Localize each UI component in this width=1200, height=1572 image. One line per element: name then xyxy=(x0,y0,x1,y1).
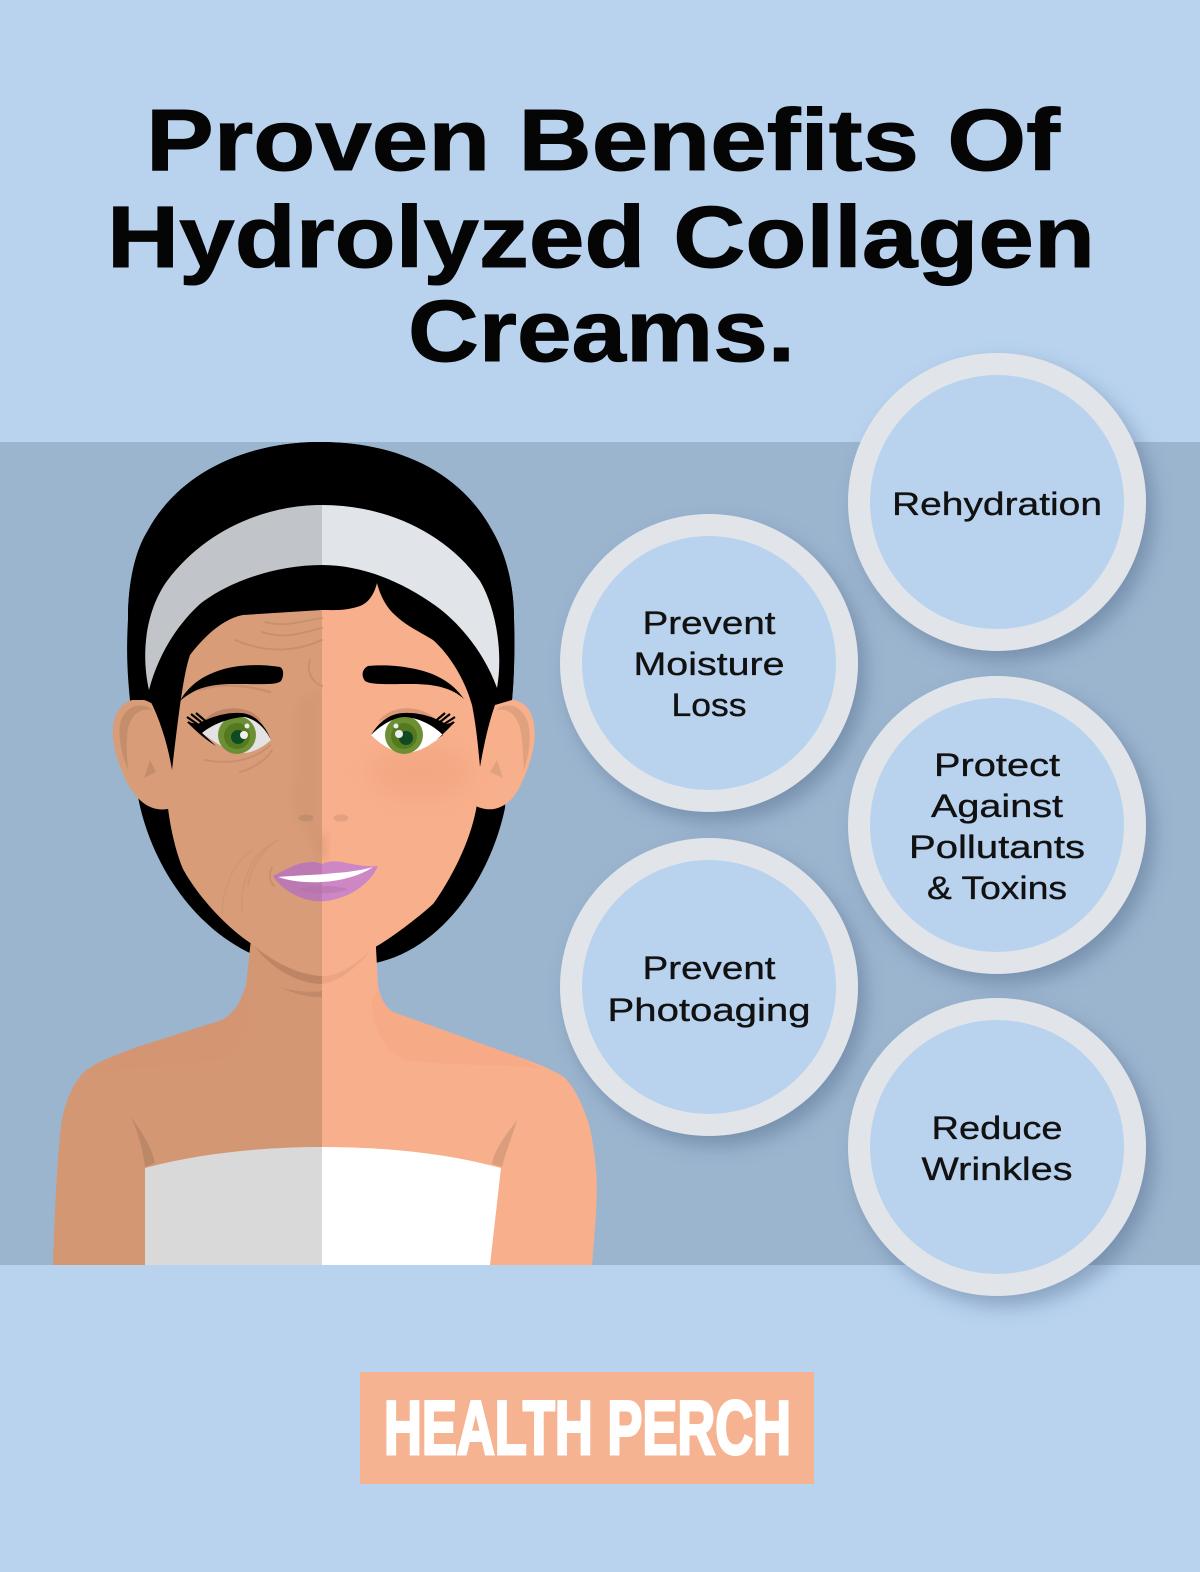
circle: Prevent Photoaging: Prevent xyxy=(642,950,776,986)
eye left xyxy=(187,708,271,754)
face shading: cheek, nose xyxy=(322,836,328,858)
circle: Prevent Photoaging: Photoaging xyxy=(608,992,810,1028)
eyebrows xyxy=(180,665,464,701)
circle: Reduce Wrinkles xyxy=(848,998,1146,1296)
ear right xyxy=(468,699,535,809)
headband xyxy=(145,505,499,690)
circle: Protect Against Pollutants & Toxins xyxy=(848,676,1146,974)
face right young xyxy=(322,583,478,976)
illustration: woman half aged half young xyxy=(53,442,597,1265)
middle band xyxy=(0,442,1200,1265)
eye right xyxy=(371,708,455,754)
collarbone shading xyxy=(90,987,540,1072)
circle: Prevent Moisture Loss xyxy=(560,514,858,812)
circle: Reduce Wrinkles: Wrinkles xyxy=(922,1151,1072,1187)
circle: Rehydration: Rehydration xyxy=(892,486,1102,522)
title xyxy=(107,92,1095,380)
hair front xyxy=(128,442,514,770)
circle: Prevent Moisture Loss: Prevent xyxy=(642,605,776,641)
title: Proven Benefits Of xyxy=(146,92,1061,189)
face left aged xyxy=(168,610,322,976)
circle: Rehydration xyxy=(848,353,1146,651)
lips xyxy=(273,861,378,901)
circle: Prevent Moisture Loss: Moisture xyxy=(634,646,784,682)
logo: Health Perch xyxy=(360,1372,814,1484)
circle: Prevent Photoaging xyxy=(560,838,858,1136)
circle: Protect Against Pollutants & Toxins: Against xyxy=(931,788,1063,824)
under-chin shadow xyxy=(255,946,369,997)
hair back xyxy=(127,442,514,963)
title: Hydrolyzed Collagen xyxy=(107,189,1095,286)
towel xyxy=(145,1147,501,1265)
circle: Prevent Moisture Loss: Loss xyxy=(672,687,746,723)
ear left xyxy=(113,699,178,810)
title: Creams. xyxy=(408,283,795,380)
wrinkles xyxy=(200,618,322,915)
nose xyxy=(298,814,348,822)
circle: Protect Against Pollutants & Toxins: Protect xyxy=(934,747,1060,783)
body right young xyxy=(322,946,597,1265)
circle: Protect Against Pollutants & Toxins: & Toxins xyxy=(927,870,1067,906)
circle: Protect Against Pollutants & Toxins: Pollutants xyxy=(909,829,1085,865)
circle: Reduce Wrinkles: Reduce xyxy=(932,1110,1062,1146)
body left aged xyxy=(53,943,322,1265)
logo: Health Perch: HEALTH PERCH xyxy=(384,1386,791,1471)
armpit creases xyxy=(131,1117,517,1167)
